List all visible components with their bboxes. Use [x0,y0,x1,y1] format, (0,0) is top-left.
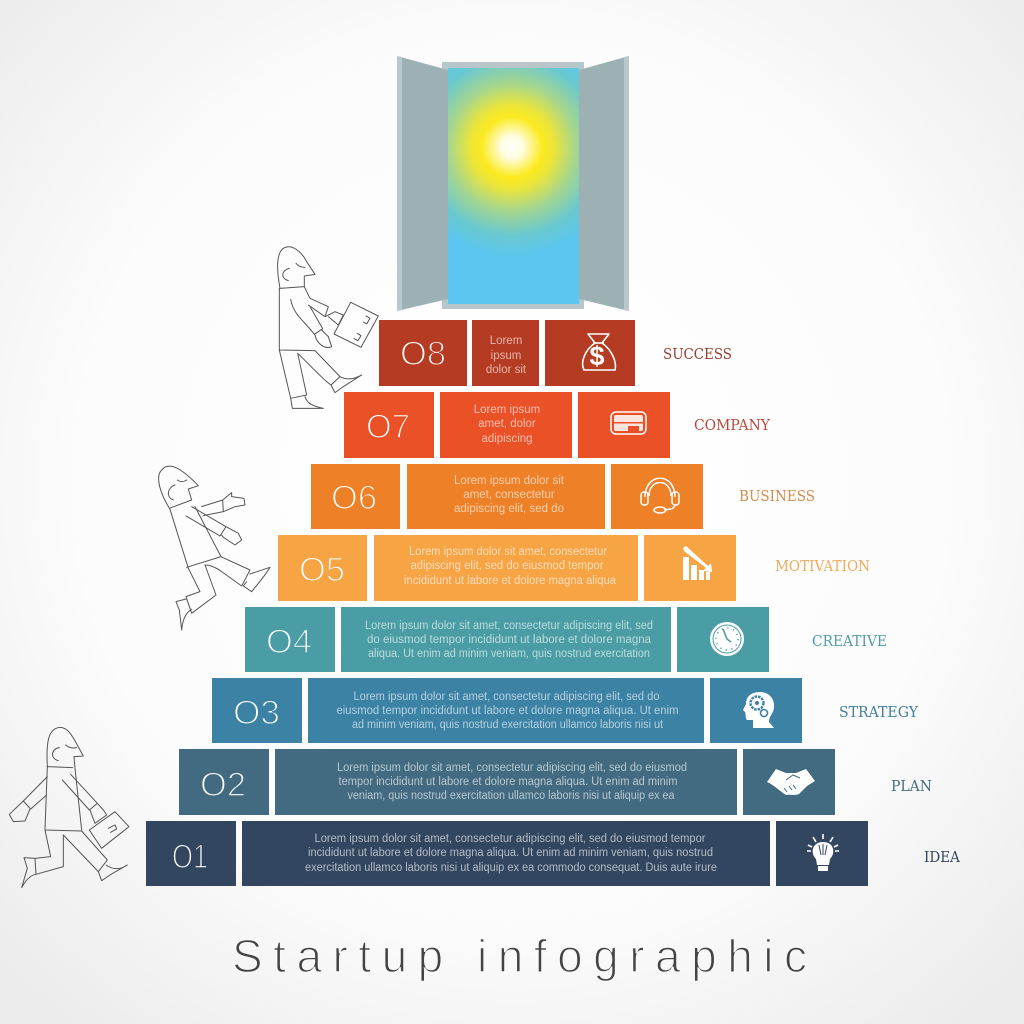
label: success: SUCCESS [663,347,732,363]
label: strategy: STRATEGY [839,705,918,721]
step 5: motivation: O5 [299,551,345,589]
step 4: creative: aliqua. Ut enim ad minim veniam, quis nostrud exercitation [368,648,650,660]
step 7: company: adipiscing [481,433,533,445]
step 8: success: Lorem [490,335,522,347]
step 2: plan: tempor incididunt ut labore et dolore magna aliqua. Ut enim ad minim [338,776,678,788]
step 7: company: Lorem ipsum [474,404,540,416]
step 6: business: O6 [331,479,377,517]
step 4: creative [245,607,769,672]
title: Startup infographic [232,930,807,982]
figure: businessman in the middle [159,466,270,630]
step 6: business: adipiscing elit, sed do [454,503,564,515]
step 4: creative: Lorem ipsum dolor sit amet, consectetur adipiscing elit, sed [365,620,653,632]
step 1: idea: incididunt ut labore et dolore magna aliqua. Ut enim ad minim veniam, quis nostrud [308,847,713,859]
icon: handshake [767,769,815,795]
step 7: company: amet, dolor [478,418,536,430]
icon: credit card [611,412,646,434]
step 8: success: O8 [400,335,446,373]
label: company: COMPANY [694,418,770,434]
step 3: strategy [212,678,802,743]
step 4: creative: O4 [266,623,312,661]
step 1: idea: Lorem ipsum dolor sit amet, consectetur adipiscing elit, sed do eiusmod tempor [314,833,706,845]
step 3: strategy: O3 [233,694,280,732]
step 8: success [379,320,635,386]
step 3: strategy: Lorem ipsum dolor sit amet, consectetur adipiscing elit, sed do [354,691,660,703]
step 6: business: amet, consectetur [463,489,555,501]
step 8: success: ipsum [491,350,521,362]
step 6: business [311,464,703,529]
step 5: motivation [278,535,736,601]
step 1: idea [146,821,868,886]
icon: headset [641,478,679,513]
label: plan: PLAN [891,779,932,795]
step 6: business: Lorem ipsum dolor sit [454,475,565,487]
figure: businessman at top [278,247,378,408]
step 3: strategy: ad minim veniam, quis nostrud exercitation ullamco laboris nisi ut [352,719,664,731]
label: idea: IDEA [924,850,960,866]
step 8: success: dolor sit [486,364,527,376]
icon: head with gears [743,692,774,728]
icon: clock [710,622,744,656]
label: business: BUSINESS [739,489,815,505]
step 5: motivation: Lorem ipsum dolor sit amet, consectetur [409,546,607,558]
icon: money bag [583,334,615,371]
step 4: creative: do eiusmod tempor incididunt ut labore et dolore magna [367,634,652,646]
icon: light bulb [807,834,839,871]
step 2: plan: Lorem ipsum dolor sit amet, consectetur adipiscing elit, sed do eiusmod [337,762,687,774]
step 1: idea: exercitation ullamco laboris nisi ut aliquip ex ea commodo consequat. Duis aute irure [305,862,717,874]
step 2: plan: O2 [200,766,246,804]
label: motivation: MOTIVATION [775,559,870,575]
step 3: strategy: eiusmod tempor incididunt ut labore et dolore magna aliqua. Ut enim [336,705,678,717]
step 7: company [344,392,670,458]
step 1: idea: O1 [172,838,208,876]
open door [397,56,629,311]
icon: money bag: $ [589,341,605,371]
step 5: motivation: incididunt ut labore et dolore magna aliqua [404,575,617,587]
figure: businessman at bottom [9,727,129,888]
step 2: plan: veniam, quis nostrud exercitation ullamco laboris nisi ut aliquip ex ea [348,790,675,802]
step 5: motivation: adipiscing elit, sed do eiusmod tempor [410,560,604,572]
step 7: company: O7 [366,408,410,446]
label: creative: CREATIVE [812,634,887,650]
icon: falling chart [683,546,712,580]
step 2: plan [179,749,835,815]
